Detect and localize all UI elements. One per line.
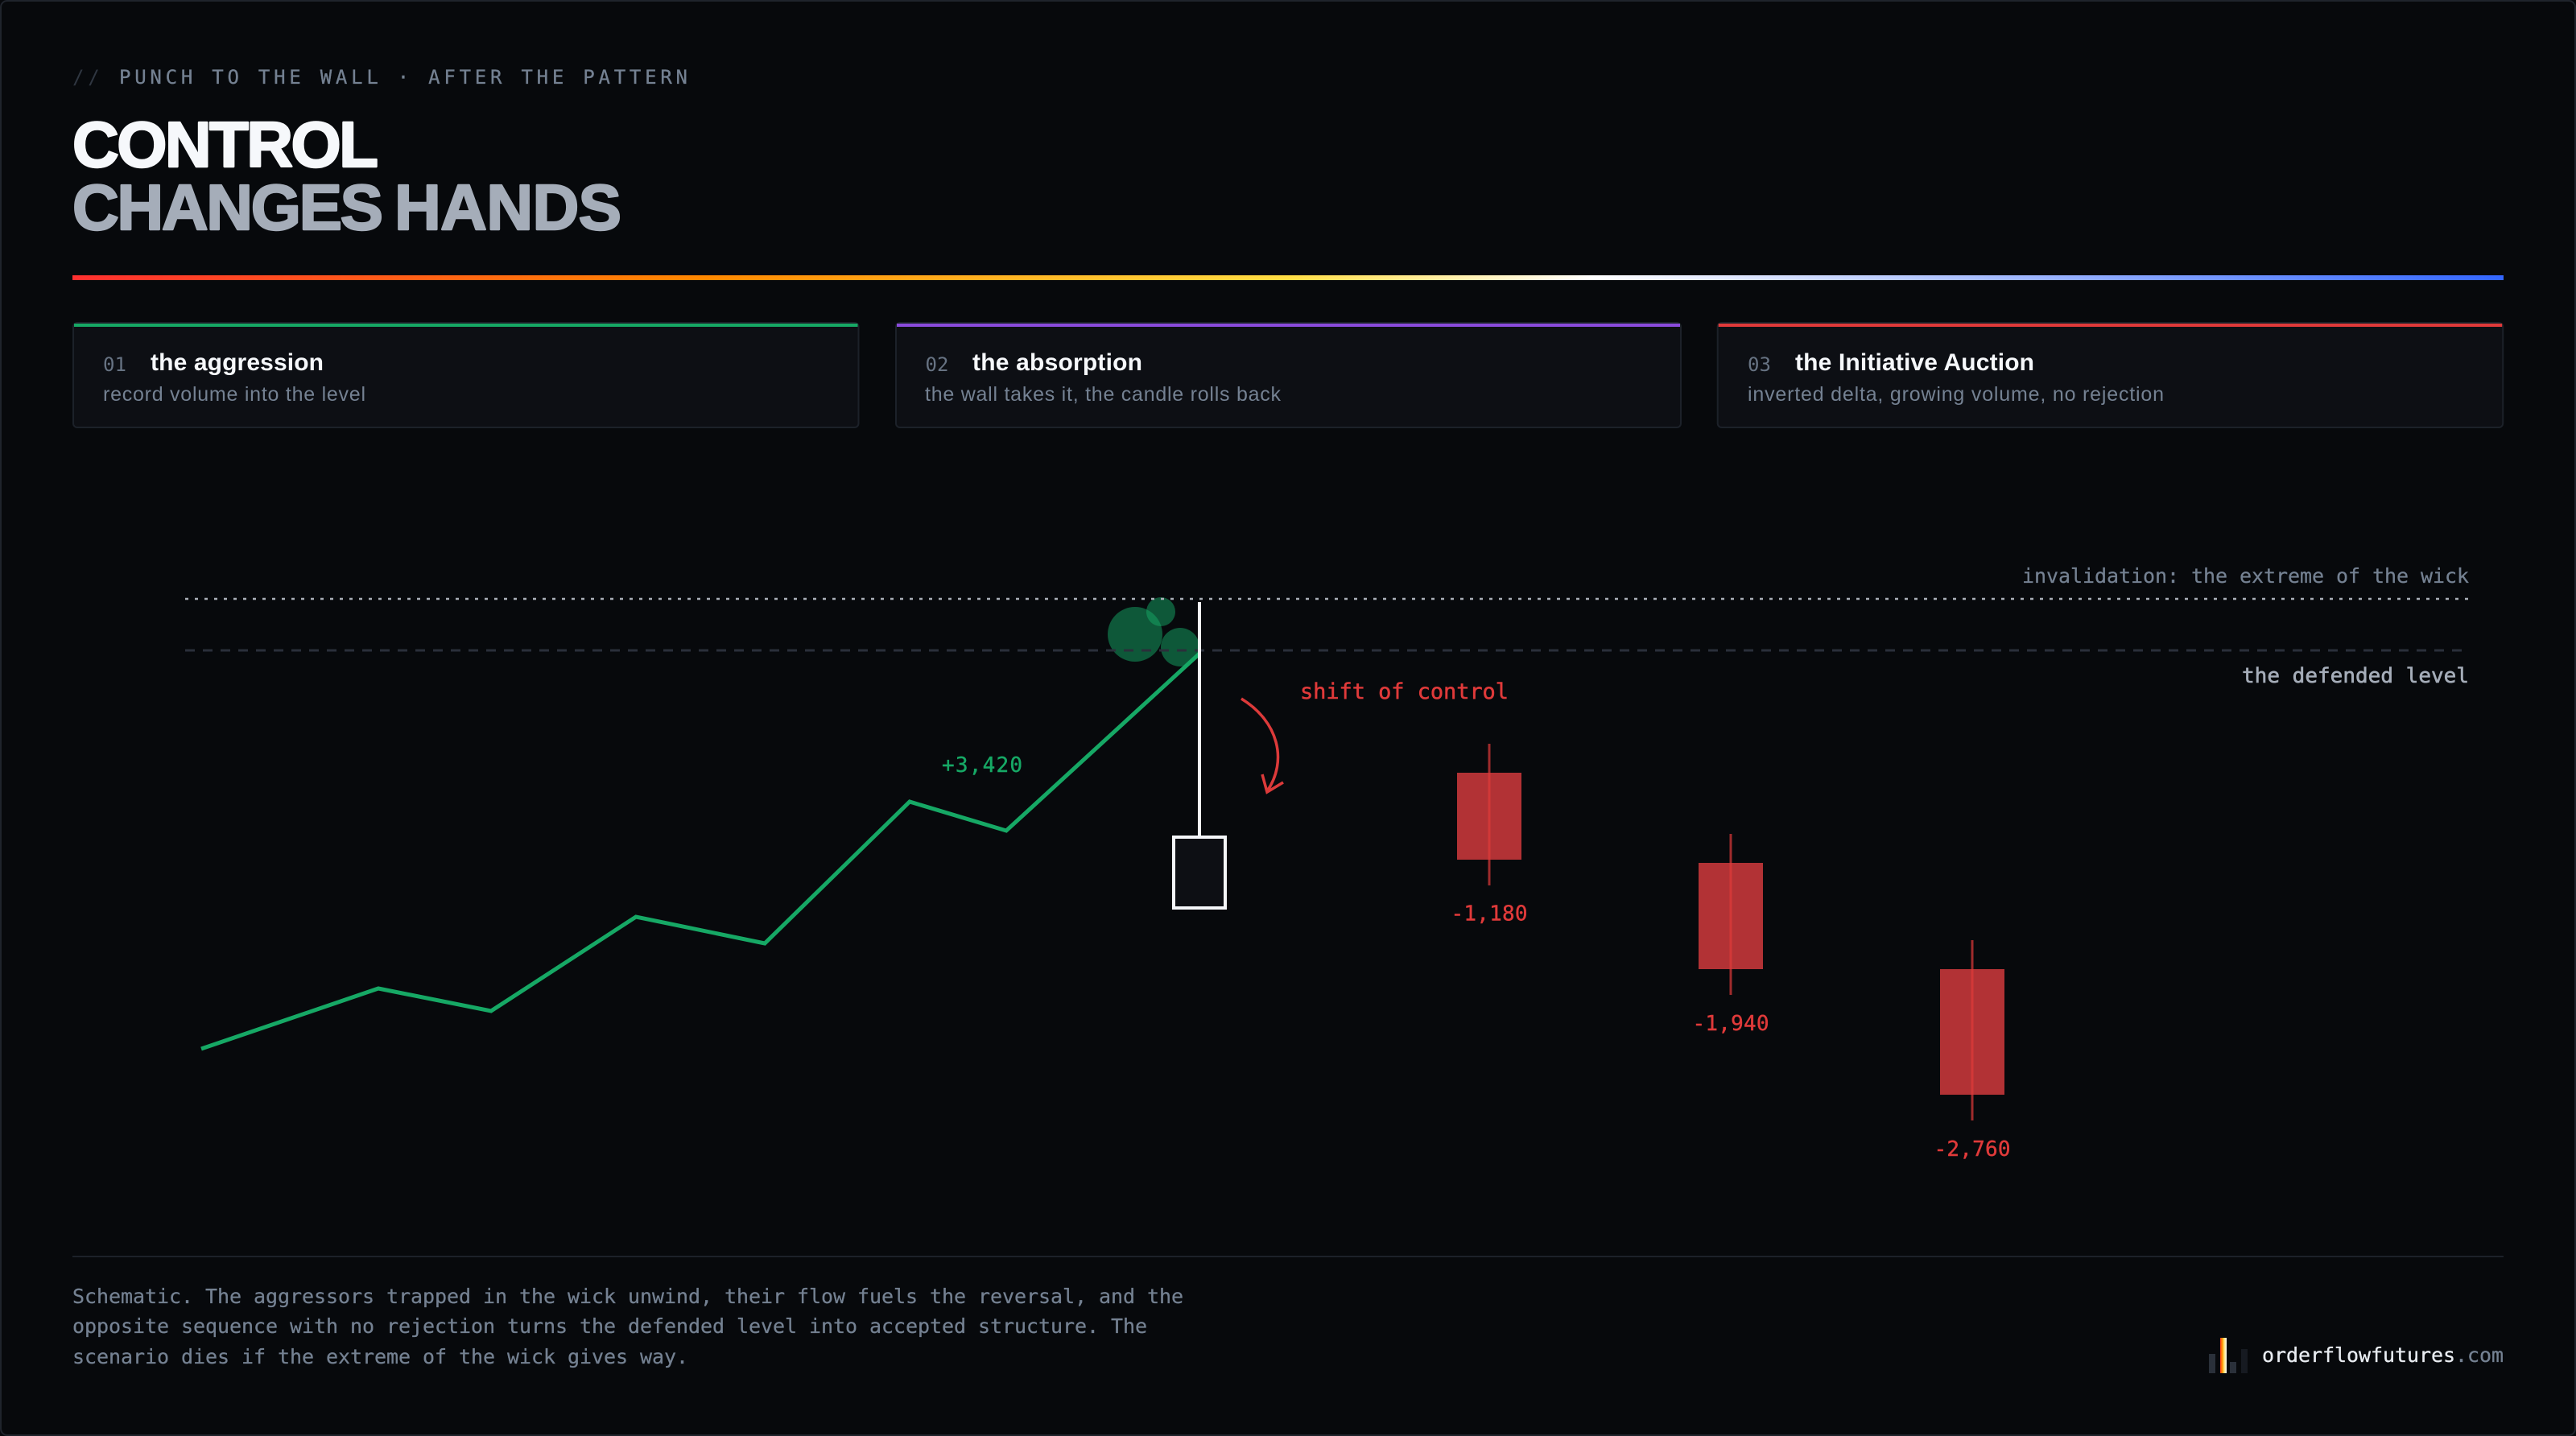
- footer note: opposite sequence with no rejection turns the defended level into accepted structure. The: [72, 1314, 1147, 1338]
- eyebrow: //: [72, 66, 103, 89]
- card: the aggression: 01: [103, 353, 126, 376]
- invalidation label: invalidation: the extreme of the wick: [2022, 564, 2469, 588]
- icon: logo bars: [2209, 1338, 2248, 1373]
- card: the aggression: record volume into the level: [103, 383, 365, 406]
- title: [72, 109, 621, 243]
- aggression line: [201, 654, 1199, 1049]
- title: CHANGES: [72, 171, 383, 243]
- footer divider: [72, 1256, 2504, 1257]
- footer note: [72, 1285, 1183, 1368]
- card: the absorption: [896, 323, 1681, 427]
- card: the aggression: [73, 323, 858, 427]
- candle: -1,180: [1451, 744, 1528, 926]
- card: the absorption: 02: [926, 353, 948, 376]
- eyebrow: PUNCH TO THE WALL · AFTER THE PATTERN: [119, 66, 691, 89]
- arrow: shift of control: [1241, 699, 1283, 792]
- card: the Initiative Auction: inverted delta, growing volume, no rejection: [1748, 383, 2164, 406]
- candle: -2,760: [1934, 940, 2011, 1162]
- defended level label: the defended level: [2242, 664, 2469, 688]
- card: the Initiative Auction: 03: [1748, 353, 1771, 376]
- absorption candle: [1174, 602, 1225, 908]
- card: the Initiative Auction: the Initiative Auction: [1795, 349, 2034, 376]
- candle: -1,940: [1692, 834, 1769, 1036]
- card: the absorption: the absorption: [972, 349, 1142, 376]
- footer note: scenario dies if the extreme of the wick gives way.: [72, 1345, 688, 1368]
- card: the Initiative Auction: [1718, 323, 2503, 427]
- title: HANDS: [394, 171, 621, 243]
- candle: -1,180: -1,180: [1451, 902, 1528, 926]
- invalidation dotted line: [185, 598, 2469, 600]
- footer note: Schematic. The aggressors trapped in the wick unwind, their flow fuels the reversal, and the: [72, 1285, 1183, 1308]
- candle: -2,760: -2,760: [1934, 1137, 2011, 1162]
- candle: -1,940: -1,940: [1692, 1012, 1769, 1036]
- defended level dashed line: [185, 649, 2463, 652]
- brand wordmark: orderflowfutures.com: [2262, 1343, 2504, 1367]
- shift of control label: shift of control: [1300, 679, 1509, 704]
- card: the absorption: the wall takes it, the candle rolls back: [925, 383, 1282, 406]
- card: the aggression: the aggression: [151, 349, 324, 376]
- delta label: +3,420: +3,420: [942, 753, 1022, 778]
- title: CONTROL: [72, 109, 378, 180]
- gradient rule: [72, 275, 2504, 280]
- absorption bubbles: [1108, 597, 1199, 666]
